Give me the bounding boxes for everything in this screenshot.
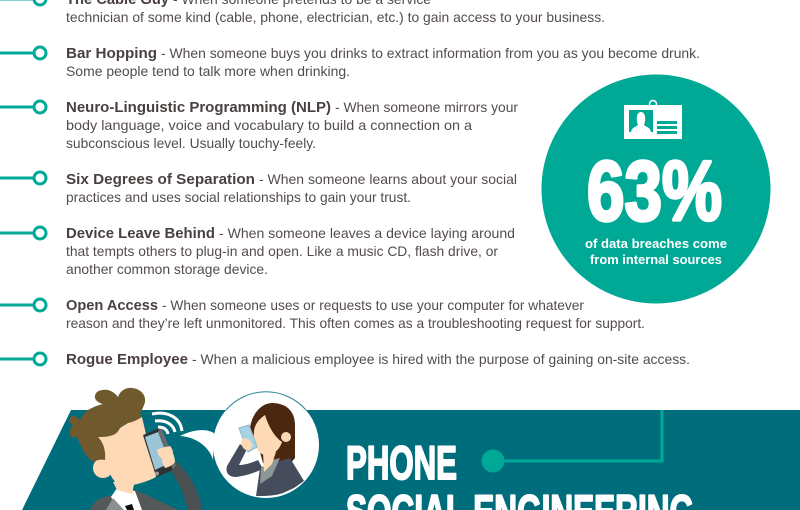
- item: Open Access: [0, 297, 645, 331]
- banner: phone social engineering: [22, 410, 800, 510]
- woman arm: [226, 444, 263, 477]
- item: Device Leave Behind: [0, 225, 515, 277]
- jacket: [90, 491, 178, 510]
- item: Bar Hopping: Some people tend to talk more when drinking.: [66, 63, 350, 79]
- figure: 63%: 63%: [587, 144, 722, 238]
- hair: [69, 388, 145, 462]
- item: Rogue Employee: - When a malicious employee is hired with the purpose of gaining on-site access.: [192, 351, 690, 367]
- caption: [585, 236, 727, 267]
- stat circle: 63%: [542, 74, 770, 304]
- arm: [172, 458, 202, 510]
- caption: from internal sources: [590, 252, 722, 267]
- item: Open Access: reason and they’re left unmonitored. This often comes as a troubleshooting request for support.: [66, 315, 645, 331]
- wifi signal: [152, 413, 182, 434]
- shirt and tie: [111, 488, 142, 510]
- item: The Cable Guy: [0, 0, 605, 25]
- woman jacket: [256, 458, 304, 496]
- neck: [113, 480, 135, 494]
- illustration: man on phone: [69, 388, 202, 510]
- item: Open Access: - When someone uses or requests to use your computer for whatever: [162, 297, 584, 313]
- icon: ID badge: [624, 100, 682, 139]
- speech bubble with woman: [180, 392, 319, 498]
- caption: of data breaches come: [585, 236, 727, 251]
- list: social engineering techniques: [0, 0, 700, 368]
- heading: [346, 436, 694, 510]
- woman neck: [263, 452, 276, 472]
- item: Six Degrees of Separation: - When someone learns about your social: [259, 171, 517, 187]
- face: [98, 417, 156, 487]
- woman hand: [241, 438, 252, 450]
- item: The Cable Guy: technician of some kind (cable, phone, electrician, etc.) to gain access to your business.: [66, 9, 605, 25]
- phone: [143, 428, 176, 477]
- item: Open Access: Open Access: [66, 298, 158, 314]
- item: Neuro-Linguistic Programming: body language, voice and vocabulary to build a connection on a: [66, 117, 472, 133]
- item: Neuro-Linguistic Programming: - When someone mirrors your: [335, 99, 518, 115]
- connector line with dot: [482, 410, 662, 472]
- ear: [93, 458, 113, 478]
- item: Device Leave Behind: another common storage device.: [66, 261, 268, 277]
- item: Neuro-Linguistic Programming: [0, 99, 518, 151]
- item: Rogue Employee: [0, 351, 690, 368]
- item: Six Degrees of Separation: Six Degrees of Separation: [66, 172, 255, 188]
- woman face: [254, 415, 282, 455]
- item: Rogue Employee: Rogue Employee: [66, 352, 188, 368]
- item: Bar Hopping: [0, 45, 700, 79]
- item: Neuro-Linguistic Programming: subconscious level. Usually touchy-feely.: [66, 135, 316, 151]
- hand: [157, 446, 175, 468]
- item: Six Degrees of Separation: practices and uses social relationships to gain your trust.: [66, 189, 411, 205]
- item: Neuro-Linguistic Programming: Neuro-Linguistic Programming (NLP): [66, 100, 331, 116]
- item: Device Leave Behind: that tempts others to plug-in and open. Like a music CD, flash drive, or: [66, 243, 498, 259]
- woman hair: [250, 403, 295, 465]
- item: Device Leave Behind: - When someone leaves a device laying around: [219, 225, 515, 241]
- item: Bar Hopping: Bar Hopping: [66, 46, 157, 62]
- woman phone: [239, 425, 257, 452]
- item: Bar Hopping: - When someone buys you drinks to extract information from you as you become drunk.: [161, 45, 700, 61]
- item: Device Leave Behind: Device Leave Behind: [66, 226, 215, 242]
- heading: PHONE: [346, 436, 457, 489]
- item: Six Degrees of Separation: [0, 171, 517, 205]
- bubble: [180, 430, 214, 460]
